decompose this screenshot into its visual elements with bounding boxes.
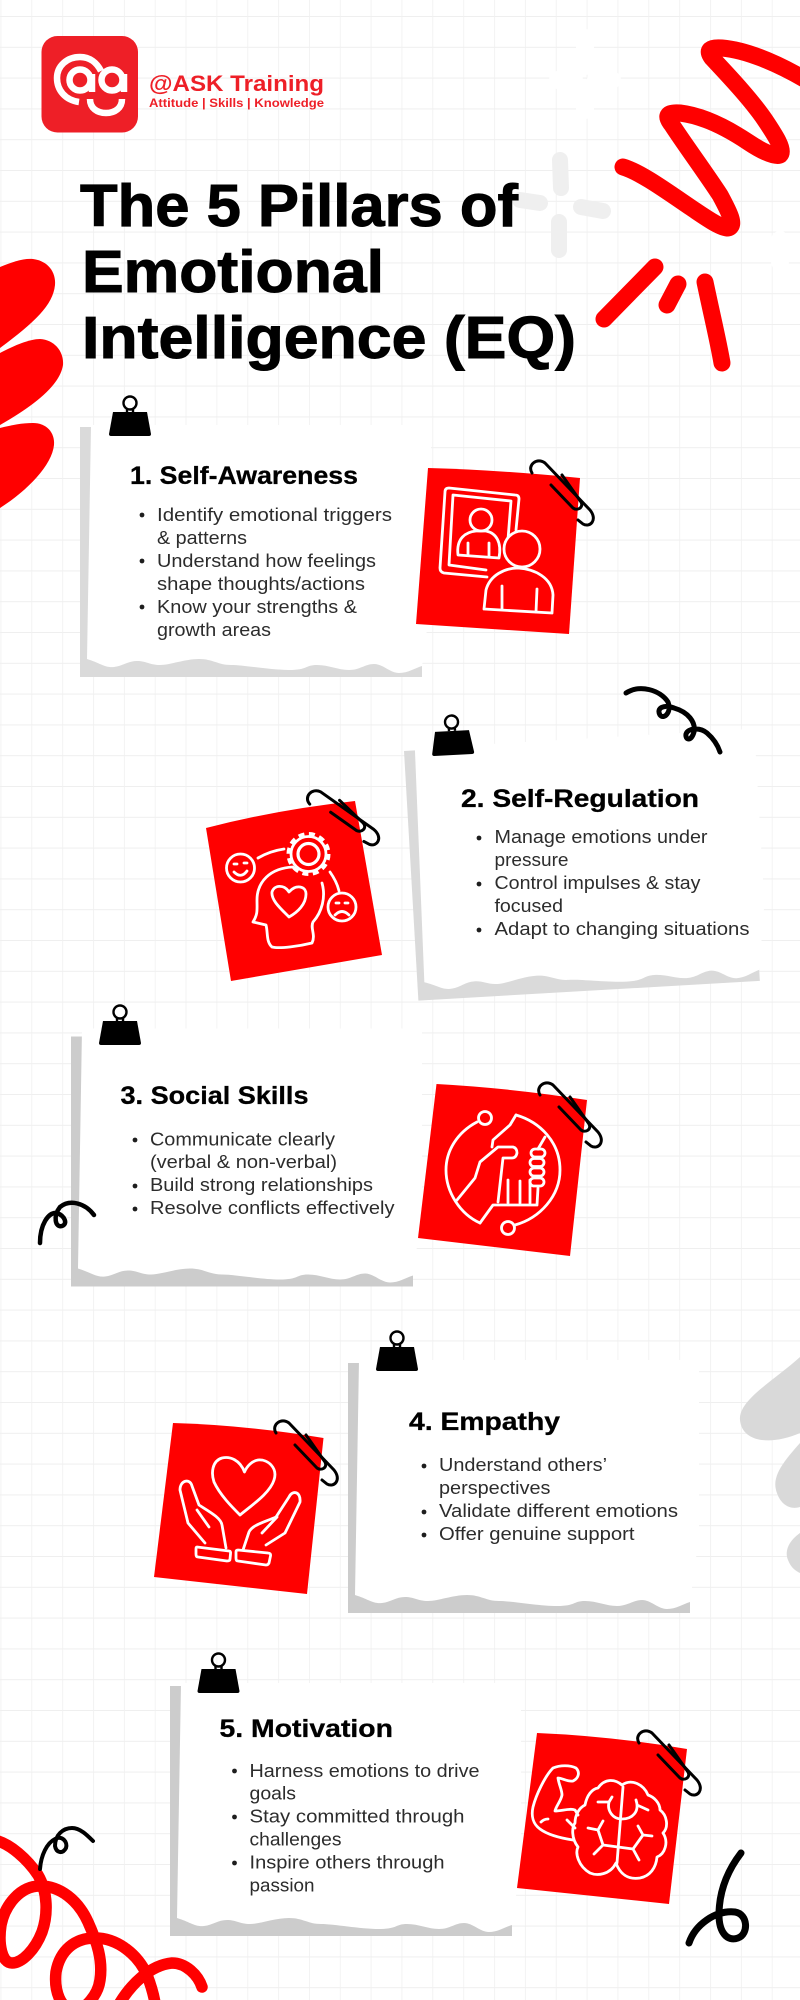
card 5 binder clip (198, 1654, 240, 1693)
decoration: black curl top (626, 689, 720, 752)
card 5 bullet list: goals (250, 1784, 296, 1804)
panel: card 5 motivation (170, 1654, 700, 1936)
card 3 bullet list: Resolve conflicts effectively (150, 1198, 394, 1218)
card 1 red note (416, 468, 580, 634)
decoration: black curl bottom left (40, 1828, 93, 1869)
panel: card 4 empathy (154, 1332, 699, 1613)
card 2 paper (404, 729, 769, 1001)
card 1 heading: 1. Self-Awareness (130, 462, 358, 490)
decoration: red zigzag scribble (623, 48, 800, 228)
card 4 bullet list: Offer genuine support (439, 1524, 634, 1544)
card 5 bullet list: passion (250, 1876, 314, 1896)
card 5 bullet list: Inspire others through (250, 1852, 444, 1872)
title (80, 173, 576, 371)
card 2 bullet list: focused (494, 896, 563, 916)
decoration: white sparkle top right (558, 38, 780, 262)
card 3 bullet list (133, 1130, 394, 1218)
card 5 paper (170, 1683, 521, 1936)
icon: handshake in circle (446, 1112, 560, 1234)
decoration: red ray strokes (604, 267, 722, 363)
logo mark (42, 36, 138, 132)
icon: hands holding heart (180, 1458, 300, 1565)
card 4 bullet list: Validate different emotions (439, 1501, 678, 1521)
card 2 bullet list (477, 827, 750, 939)
card 4 paper clip (275, 1421, 337, 1485)
card 4 paper (348, 1360, 699, 1613)
card 3 red note (418, 1084, 587, 1256)
title: The 5 Pillars of (80, 173, 518, 239)
card 3 paper clip (539, 1083, 601, 1147)
card 5 bullet list (232, 1761, 480, 1896)
card 4 bullet list: Understand others’ (439, 1455, 607, 1475)
card 2 heading: 2. Self-Regulation (461, 785, 699, 813)
icon: arm and brain (532, 1766, 667, 1878)
decoration: red spiral bottom left (0, 1840, 202, 2000)
card 3 heading: 3. Social Skills (120, 1082, 308, 1110)
card 5 bullet list: Harness emotions to drive (250, 1761, 480, 1781)
card 5 red note (517, 1733, 687, 1904)
card 1 binder clip (109, 396, 151, 436)
card 2 red note (206, 801, 382, 981)
card 5 bullet list: Stay committed through (250, 1806, 464, 1826)
card 4 heading: 4. Empathy (409, 1408, 560, 1436)
logo wordmark: @ASK Training (149, 71, 324, 96)
title: Intelligence (EQ) (82, 305, 576, 371)
card 4 binder clip (376, 1332, 418, 1371)
card 1 bullet list (140, 505, 392, 640)
card 4 bullet list (422, 1455, 678, 1544)
card 1 bullet list: Know your strengths & (157, 597, 357, 617)
card 3 bullet list: Communicate clearly (150, 1130, 335, 1150)
icon: head with heart, gear and faces (226, 834, 356, 948)
card 1 bullet list: growth areas (157, 620, 271, 640)
card 5 bullet list: challenges (250, 1830, 342, 1850)
card 2 bullet list: Control impulses & stay (494, 873, 700, 893)
card 2 bullet list: pressure (494, 850, 568, 870)
card 1 bullet list: shape thoughts/actions (157, 574, 365, 594)
card 3 binder clip (99, 1006, 141, 1045)
card 1 paper clip (531, 461, 593, 525)
card 1 bullet list: Identify emotional triggers (157, 505, 392, 525)
card 4 red note (154, 1423, 324, 1594)
card 4 bullet list: perspectives (439, 1478, 550, 1498)
card 5 paper clip (638, 1731, 700, 1795)
card 2 bullet list: Adapt to changing situations (494, 919, 750, 939)
logo (42, 36, 324, 132)
panel: card 3 social skills (40, 1006, 601, 1286)
decoration: red petals left (0, 259, 63, 508)
panel: card 2 self-regulation (206, 714, 769, 1001)
decoration: grey sparkle (520, 160, 603, 250)
card 3 paper (71, 1028, 422, 1286)
decoration: grey blob right (740, 1357, 800, 1573)
card 3 bullet list: (verbal & non-verbal) (150, 1152, 337, 1172)
card 1 bullet list: & patterns (157, 528, 247, 548)
card 3 bullet list: Build strong relationships (150, 1175, 373, 1195)
panel: card 1 self-awareness (80, 396, 593, 677)
card 1 paper (80, 425, 431, 677)
card 5 heading: 5. Motivation (220, 1715, 393, 1743)
title: Emotional (82, 239, 384, 305)
icon: person and mirror (440, 488, 553, 613)
decoration: black curl card 3 (40, 1203, 94, 1243)
card 1 bullet list: Understand how feelings (157, 551, 376, 571)
card 2 bullet list: Manage emotions under (494, 827, 708, 847)
card 2 paper clip (306, 781, 380, 855)
decoration: black curl bottom right (689, 1853, 746, 1943)
card 2 binder clip (430, 714, 474, 756)
logo tagline: Attitude | Skills | Knowledge (149, 96, 324, 110)
